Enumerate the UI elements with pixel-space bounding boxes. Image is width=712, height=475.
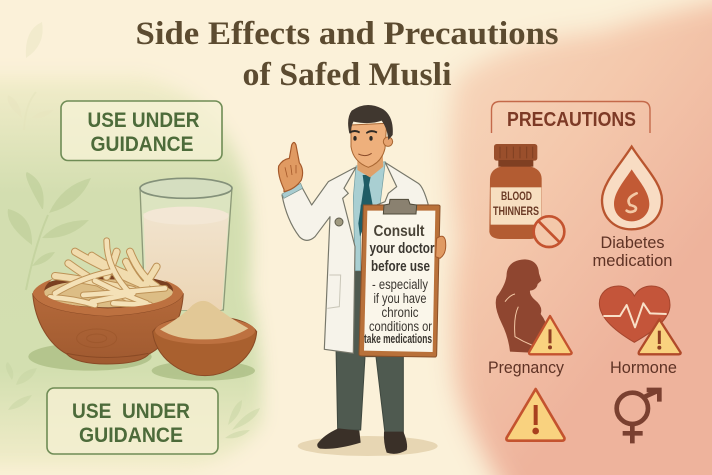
clipboard text: conditions or	[369, 319, 432, 334]
doctor holding clipboard	[278, 105, 446, 456]
cuff and raised hand	[278, 142, 303, 198]
label: use under guidance (bottom)	[47, 388, 218, 454]
neck	[357, 153, 383, 177]
decorative leaves: lower sprigs	[6, 362, 260, 438]
label: diabetes medication: medication	[592, 252, 672, 270]
label: hormone: Hormone	[610, 359, 677, 377]
icon: blood thinners bottle with prohibition sign: THINNERS	[493, 204, 539, 218]
icon: blood thinners bottle with prohibition sign	[489, 144, 564, 247]
icon: gender symbol	[617, 390, 659, 443]
label: use under guidance (bottom): GUIDANCE	[79, 424, 183, 447]
trousers	[336, 272, 403, 433]
precautions heading tab	[492, 102, 650, 133]
illustration: safed musli bowls and milk glass	[28, 178, 257, 381]
shoes	[317, 428, 407, 454]
wooden bowl of powder	[153, 301, 257, 376]
icon: blood drop	[602, 147, 662, 229]
eyes and mouth	[349, 130, 377, 141]
icon: blood thinners bottle with prohibition sign: BLOOD	[501, 189, 532, 203]
clipboard text: Consult	[374, 223, 425, 240]
decorative leaves: left sprigs	[8, 172, 91, 290]
title: of Safed Musli	[242, 57, 452, 93]
label: diabetes medication: Diabetes	[600, 234, 664, 252]
lab coat	[282, 163, 428, 353]
clipboard	[359, 199, 440, 357]
floor shadow	[298, 436, 438, 456]
label: use under guidance (top): USE UNDER	[88, 109, 200, 132]
clipboard text: your doctor	[370, 240, 435, 257]
stethoscope	[335, 218, 343, 226]
clipboard text: chronic	[382, 305, 419, 320]
holding hand	[436, 236, 446, 258]
shirt	[353, 162, 385, 271]
wooden bowl of roots	[33, 241, 183, 364]
face	[351, 123, 387, 167]
label: use under guidance (bottom): USE UNDER	[72, 400, 190, 423]
clipboard text: take medications	[364, 332, 432, 346]
precautions heading tab: PRECAUTIONS	[507, 109, 636, 131]
glass of milk	[140, 178, 232, 310]
clipboard text: if you have	[374, 291, 426, 306]
clipboard text	[364, 223, 435, 346]
title: Side Effects and Precautions	[136, 16, 559, 52]
tie	[358, 175, 373, 237]
icon: heart with pulse and warning	[599, 286, 681, 354]
icon: pregnant silhouette with warning	[496, 259, 572, 354]
icon: warning triangle	[506, 389, 564, 441]
label: use under guidance (top): GUIDANCE	[90, 133, 194, 156]
label: diabetes medication	[592, 234, 672, 270]
shadow under bowls	[28, 343, 255, 381]
title	[136, 16, 559, 93]
clipboard text: before use	[371, 258, 430, 275]
label: pregnancy: Pregnancy	[488, 359, 565, 377]
label: use under guidance (top)	[61, 101, 222, 160]
hair	[348, 105, 393, 140]
decorative leaves: top-left sprig	[8, 22, 54, 130]
clipboard text: - especially	[372, 277, 428, 292]
